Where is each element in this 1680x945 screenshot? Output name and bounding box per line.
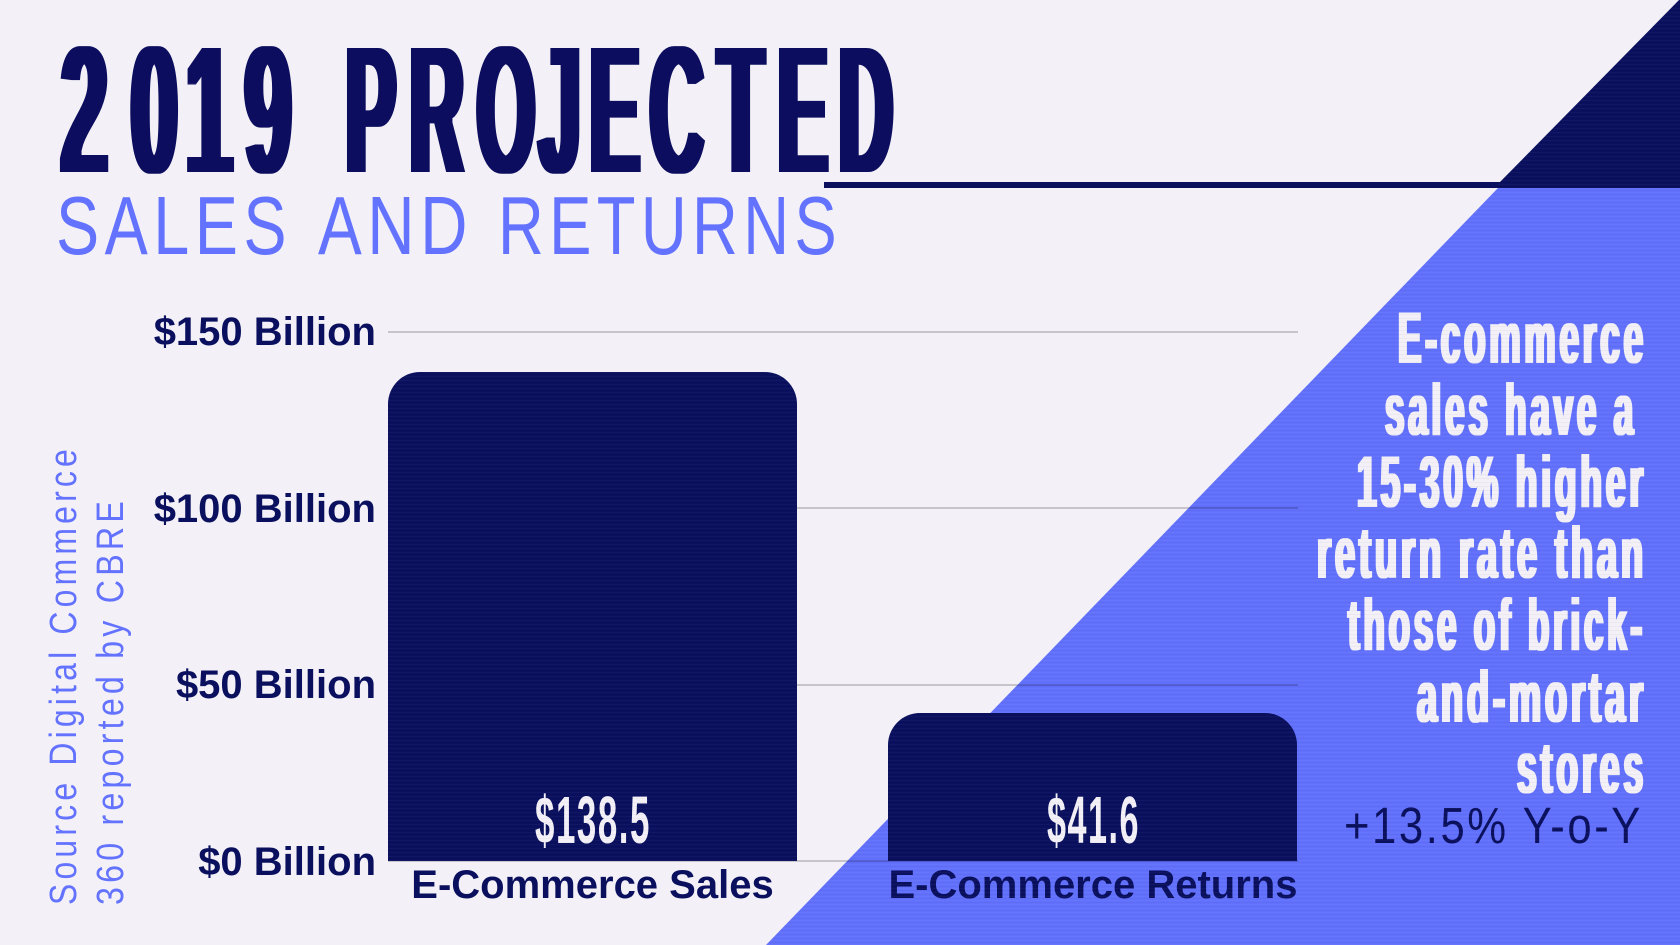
subtitle: SALES [56, 179, 292, 272]
bar: e-commerce returns [888, 713, 1297, 861]
title [61, 5, 893, 215]
category labels: E-Commerce Returns [888, 863, 1298, 907]
subtitle [56, 179, 842, 272]
category labels [411, 863, 1298, 907]
y axis labels: $100 Billion [154, 487, 376, 531]
callout text [1317, 298, 1647, 809]
category labels: E-Commerce Sales [411, 863, 774, 907]
y axis labels: $50 Billion [176, 663, 376, 707]
bar value: returns: $41.6 [1047, 783, 1140, 858]
title: PROJECTED [346, 7, 893, 215]
source note [43, 445, 132, 905]
title: 2019 [61, 5, 291, 214]
source note: 360 reported by CBRE [90, 497, 132, 905]
header rule [824, 182, 1504, 188]
y axis labels: $0 Billion [198, 840, 376, 884]
y axis labels: $150 Billion [154, 310, 376, 354]
navy corner triangle [1494, 0, 1680, 188]
source note: Source Digital Commerce [43, 445, 85, 905]
bar value: sales: $138.5 [535, 783, 651, 858]
subtitle: AND [318, 179, 473, 272]
subtitle: RETURNS [498, 179, 842, 272]
grid lines [388, 331, 1298, 862]
bar: e-commerce sales [388, 372, 797, 861]
blue diagonal panel [766, 188, 1680, 945]
bar chart [154, 310, 1298, 907]
y axis labels [154, 310, 376, 884]
